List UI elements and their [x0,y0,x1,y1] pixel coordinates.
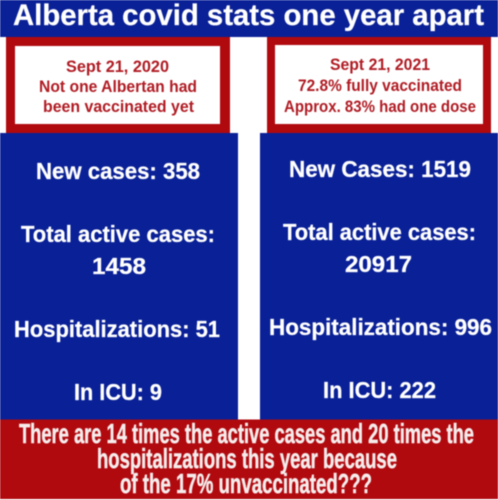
panel: right 2021 stats: Total active cases: [283,219,476,245]
panel: right date callout: Approx. 83% had one dose [284,97,476,116]
footer conclusion banner: of the 17% unvaccinated??? [120,468,372,499]
panel: left 2020 stats: 1458 [92,253,146,279]
panel: left 2020 stats: In ICU: 9 [74,379,162,405]
panel: left 2020 stats: Hospitalizations: 51 [14,316,220,342]
panel: right 2021 stats [260,133,498,420]
panel: left date callout: Not one Albertan had [39,77,197,96]
panel: left date callout [6,37,230,133]
panel: left 2020 stats [0,133,238,420]
panel: right 2021 stats: In ICU: 222 [323,377,436,403]
panel: right date callout: 72.8% fully vaccinated [298,76,462,95]
panel: left date callout: been vaccinated yet [43,97,194,116]
panel: right 2021 stats: New Cases: 1519 [289,156,471,182]
panel: left 2020 stats: New cases: 358 [36,158,200,184]
panel: left 2020 stats: Total active cases: [21,221,215,247]
panel: right date callout [267,37,491,133]
panel: right 2021 stats: 20917 [345,251,412,277]
panel: right date callout: Sept 21, 2021 [330,55,430,74]
panel: right 2021 stats: Hospitalizations: 996 [269,314,492,340]
panel: left date callout: Sept 21, 2020 [66,57,169,76]
footer conclusion banner [0,418,498,499]
